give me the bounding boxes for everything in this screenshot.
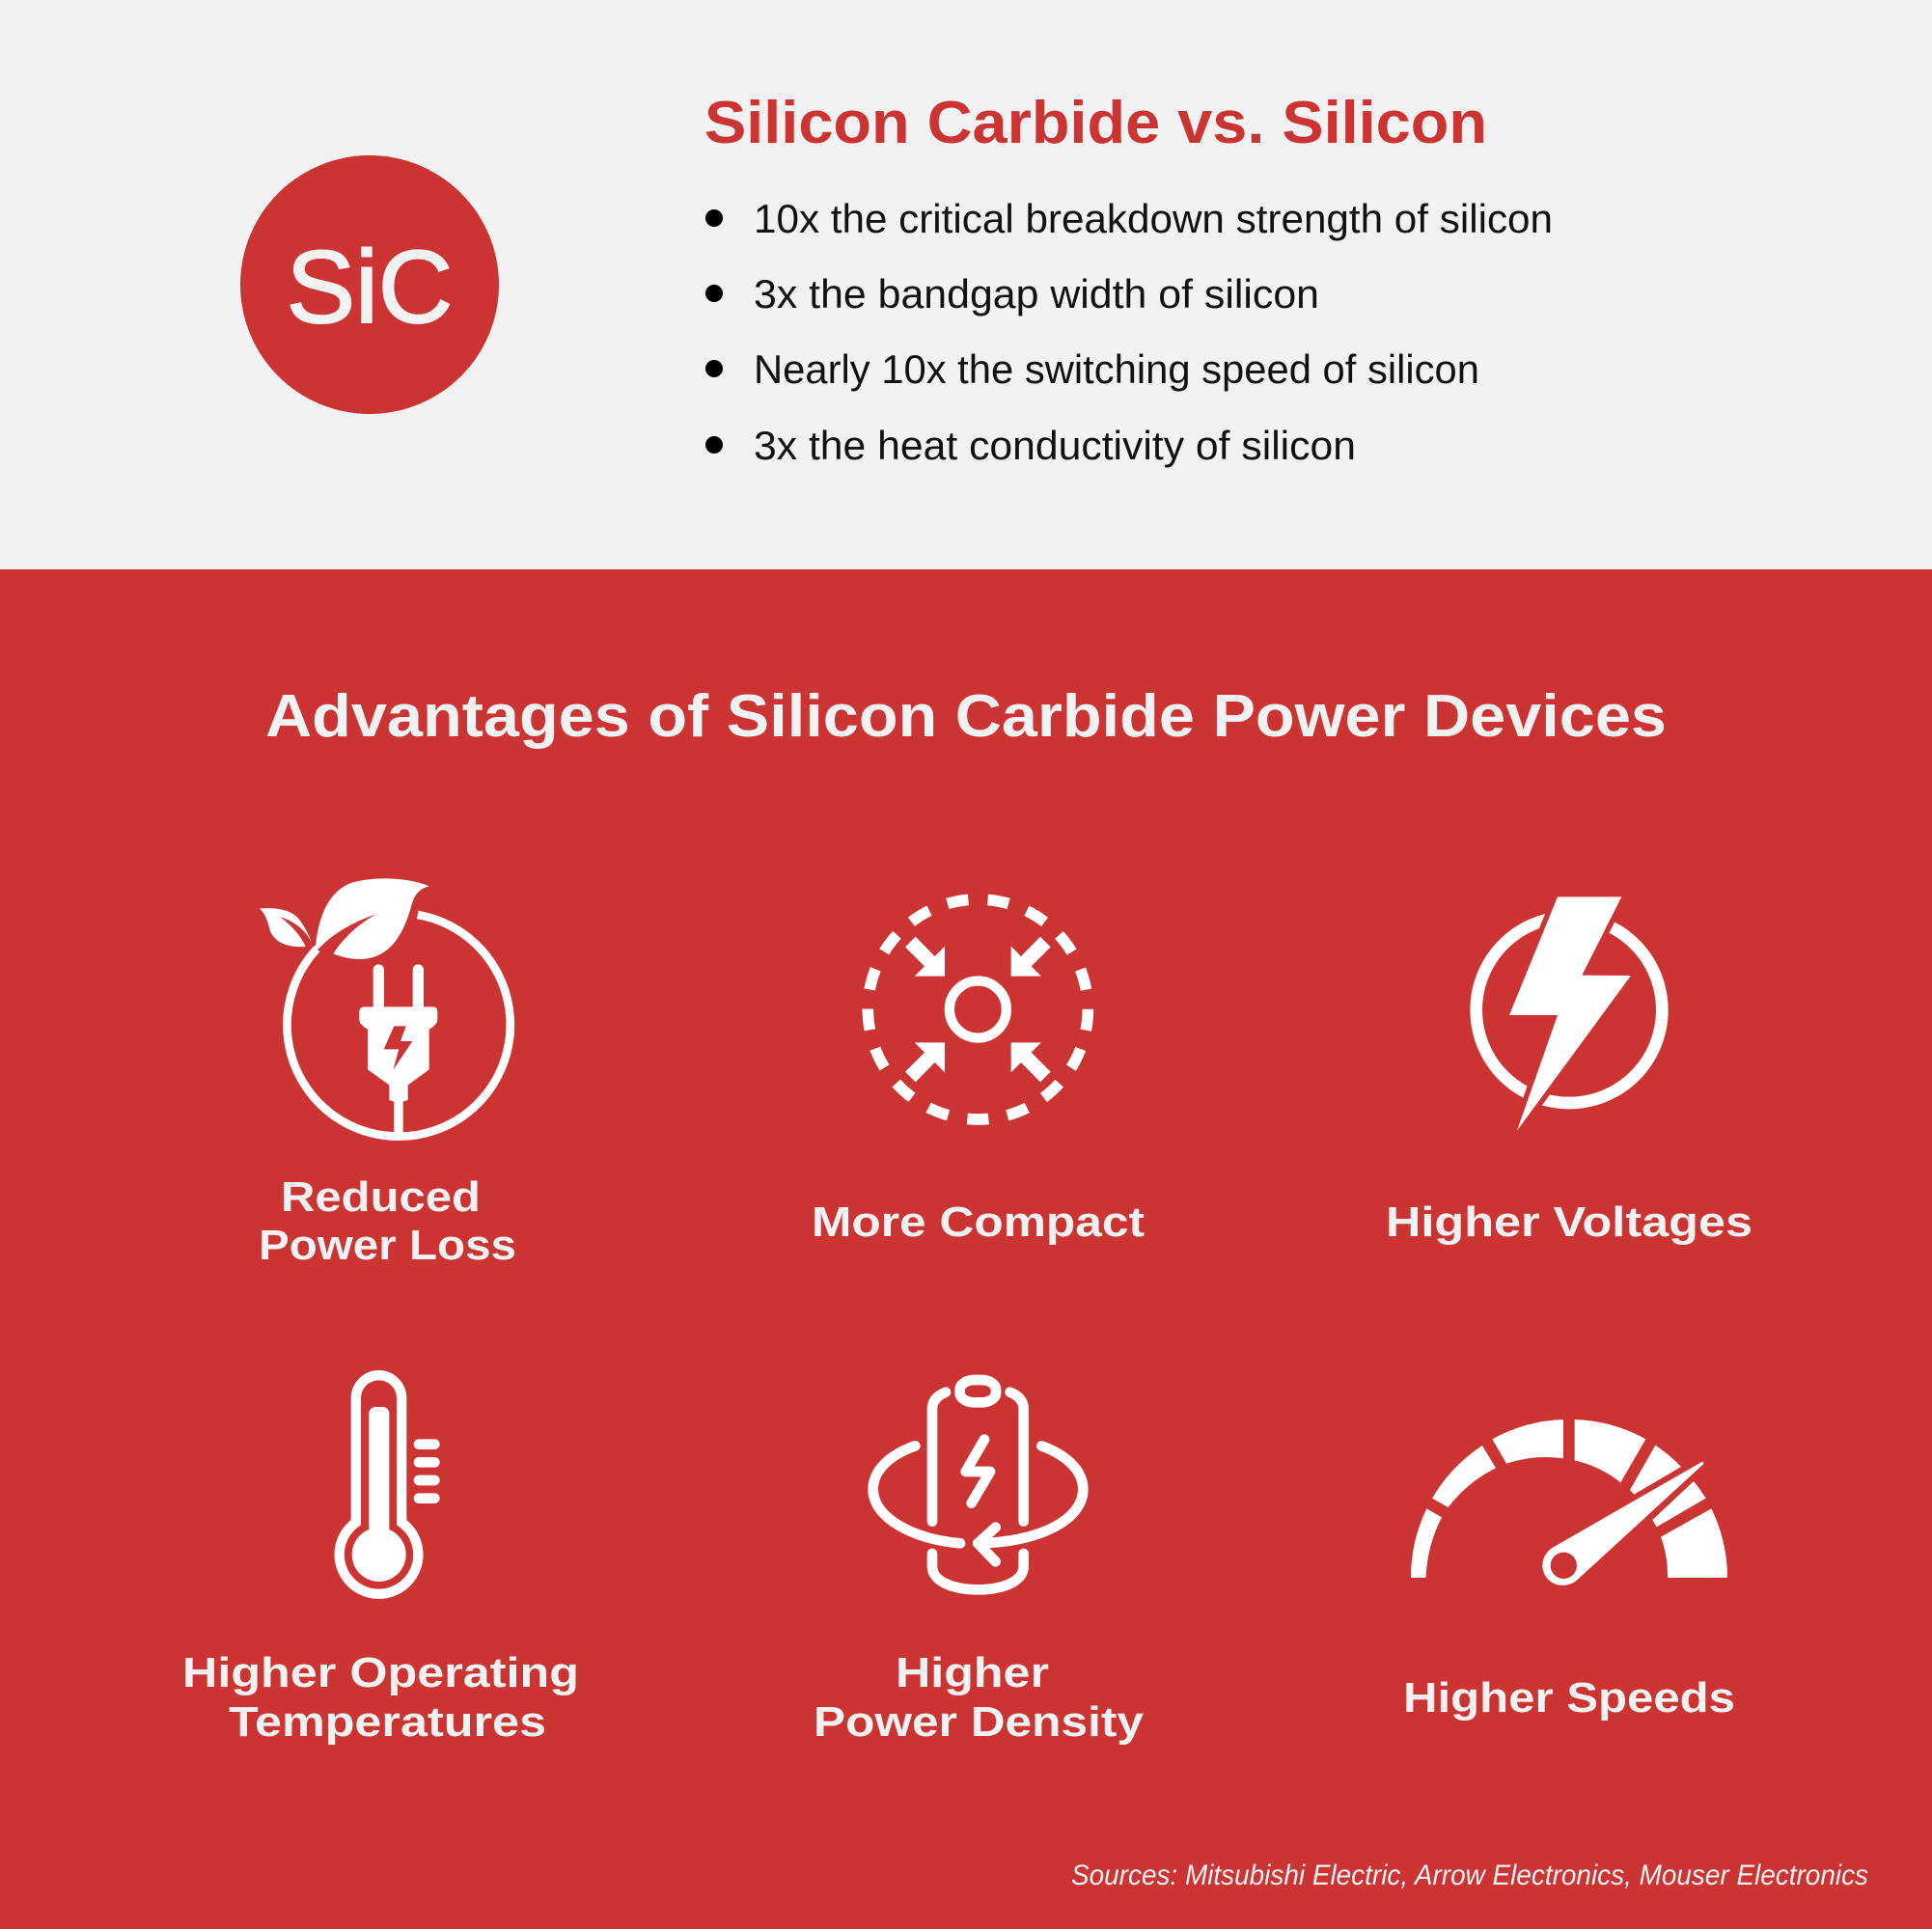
label: higher power density: Higher (896, 1649, 1049, 1696)
icon: SiC badge: SiC (287, 229, 453, 344)
bullet list (705, 196, 1553, 468)
panel: advantages (0, 569, 1932, 1929)
heading: silicon carbide vs silicon: Silicon Carbide vs. Silicon (704, 90, 1487, 156)
icon: speedometer (1411, 1419, 1727, 1585)
sources: Sources: Mitsubishi Electric, Arrow Electronics, Mouser Electronics (1071, 1860, 1868, 1891)
heading: advantages: Advantages of Silicon Carbide Power Devices (265, 683, 1667, 750)
icon: plug with leaves (260, 878, 511, 1137)
bullet list: 10x the critical breakdown strength of silicon (754, 196, 1553, 241)
bullet list: 3x the heat conductivity of silicon (754, 423, 1356, 468)
bullet list: 3x the bandgap width of silicon (754, 271, 1319, 317)
panel: silicon carbide vs silicon (0, 0, 1932, 569)
label: reduced power loss: Reduced (281, 1173, 481, 1221)
label: higher speeds: Higher Speeds (1403, 1674, 1735, 1722)
icon: compress arrows (858, 890, 1098, 1129)
icon: lightning bolt (1477, 896, 1662, 1131)
icon: SiC badge (240, 155, 499, 414)
label: reduced power loss (259, 1173, 516, 1269)
label: higher voltages: Higher Voltages (1386, 1199, 1753, 1246)
icon: thermometer (340, 1375, 440, 1594)
label: more compact: More Compact (812, 1199, 1145, 1246)
label: higher power density (814, 1649, 1145, 1746)
label: higher operating temperatures: Higher Operating (182, 1649, 579, 1696)
icon: battery with orbit arrow (873, 1380, 1083, 1589)
label: reduced power loss: Power Loss (259, 1222, 516, 1269)
label: higher operating temperatures (182, 1649, 579, 1746)
label: higher power density: Power Density (814, 1698, 1145, 1746)
label: higher operating temperatures: Temperatures (229, 1698, 546, 1746)
bullet list: Nearly 10x the switching speed of silicon (754, 346, 1479, 392)
